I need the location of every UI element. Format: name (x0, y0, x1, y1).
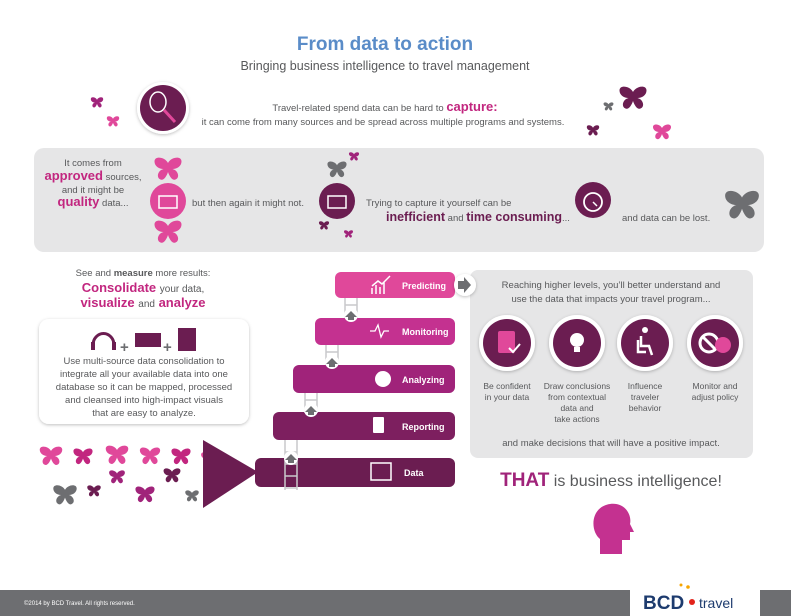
icon: capture net (137, 82, 189, 134)
step: monitoring: Monitoring (402, 327, 448, 337)
panel: higher levels: Be confident (483, 381, 531, 391)
panel: higher levels: use the data that impacts your travel program... (511, 294, 711, 305)
icons: headset card invoice (91, 328, 196, 356)
heading: consolidate: visualize and analyze (80, 295, 206, 310)
panel: consolidation: that are easy to analyze. (92, 408, 196, 419)
heading: consolidate: See and measure more results: (76, 268, 210, 279)
step: reporting: Reporting (402, 422, 444, 432)
icon: head (593, 504, 634, 554)
footer: ©2014 by BCD Travel. All rights reserved. (24, 600, 135, 607)
panel: higher levels: Draw conclusions (544, 381, 610, 391)
panel: higher levels: and make decisions that will have a positive impact. (502, 438, 720, 449)
text: approved sources: It comes from (64, 158, 122, 169)
step: predicting (335, 272, 455, 298)
ladders (285, 298, 357, 490)
text: data lost: and data can be lost. (622, 213, 710, 224)
icon: confident (479, 315, 535, 371)
text: approved sources: approved sources, (44, 168, 142, 183)
text: might not: but then again it might not. (192, 198, 304, 209)
text: inefficient (366, 198, 570, 224)
panel: consolidation: Use multi-source data consolidation to (63, 356, 225, 367)
icons: headset card invoice: + (163, 339, 172, 356)
logo: travel (699, 595, 733, 611)
chart: data ladder (255, 272, 455, 490)
step: analyzing (293, 365, 455, 393)
logo (630, 579, 760, 616)
step: predicting: Predicting (402, 281, 446, 291)
up arrows (284, 308, 358, 465)
title: From data to action (297, 34, 473, 55)
icon: stopwatch (575, 182, 611, 218)
panel: higher levels: behavior (629, 403, 661, 413)
panel: higher levels: data and (560, 403, 594, 413)
icon: traveler (617, 315, 673, 371)
panel: capture challenges (34, 148, 764, 252)
intro text (202, 99, 564, 128)
subtitle: Bringing business intelligence to travel management (240, 59, 530, 73)
panel: higher levels: Monitor and (693, 381, 738, 391)
intro text: Travel-related spend data can be hard to capture: (272, 99, 498, 114)
panel: higher levels: Influence (628, 381, 663, 391)
funnel (203, 440, 258, 508)
heading: consolidate: Consolidate your data, (82, 280, 204, 295)
panel: consolidation (39, 319, 249, 424)
intro text: it can come from many sources and be spread across multiple programs and systems. (202, 117, 564, 128)
footer (0, 590, 791, 616)
panel: consolidation: integrate all your available data into one (60, 369, 228, 380)
panel: consolidation: database so it can be mapped, processed (56, 382, 232, 393)
icon: quality data (150, 158, 186, 243)
logo: BCD (643, 593, 684, 614)
panel: higher levels: traveler (631, 392, 659, 402)
panel: higher levels: in your data (485, 392, 529, 402)
butterflies top (91, 87, 671, 139)
panel: higher levels: Reaching higher levels, you’ll better understand and (502, 280, 720, 291)
step: reporting (273, 412, 455, 440)
panel: higher levels: take actions (554, 414, 600, 424)
text: inefficient: Trying to capture it yourself can be (366, 198, 511, 209)
text: approved sources: quality data... (58, 194, 128, 209)
panel: higher levels: from contextual (548, 392, 606, 402)
icons: headset card invoice: + (120, 339, 129, 356)
butterflies bottom left (40, 446, 217, 504)
panel: higher levels: adjust policy (692, 392, 739, 402)
butterfly grey (725, 191, 759, 218)
icon: warning data (319, 152, 359, 238)
conclusion: THAT is business intelligence! (500, 470, 722, 491)
icon: policy (687, 315, 743, 371)
step: data (255, 458, 455, 487)
text: approved sources: and it might be (62, 185, 124, 196)
step: analyzing: Analyzing (402, 375, 445, 385)
panel: higher levels (470, 270, 753, 458)
text: inefficient: inefficient and time consuming... (386, 210, 570, 224)
heading: consolidate (76, 268, 210, 310)
step: data: Data (404, 468, 425, 478)
step: monitoring (315, 318, 455, 345)
arrow: to panel (454, 274, 476, 296)
icon: bulb (549, 315, 605, 371)
panel: consolidation: and cleansed into high-impact visuals (65, 395, 223, 406)
text: approved sources (44, 158, 142, 209)
